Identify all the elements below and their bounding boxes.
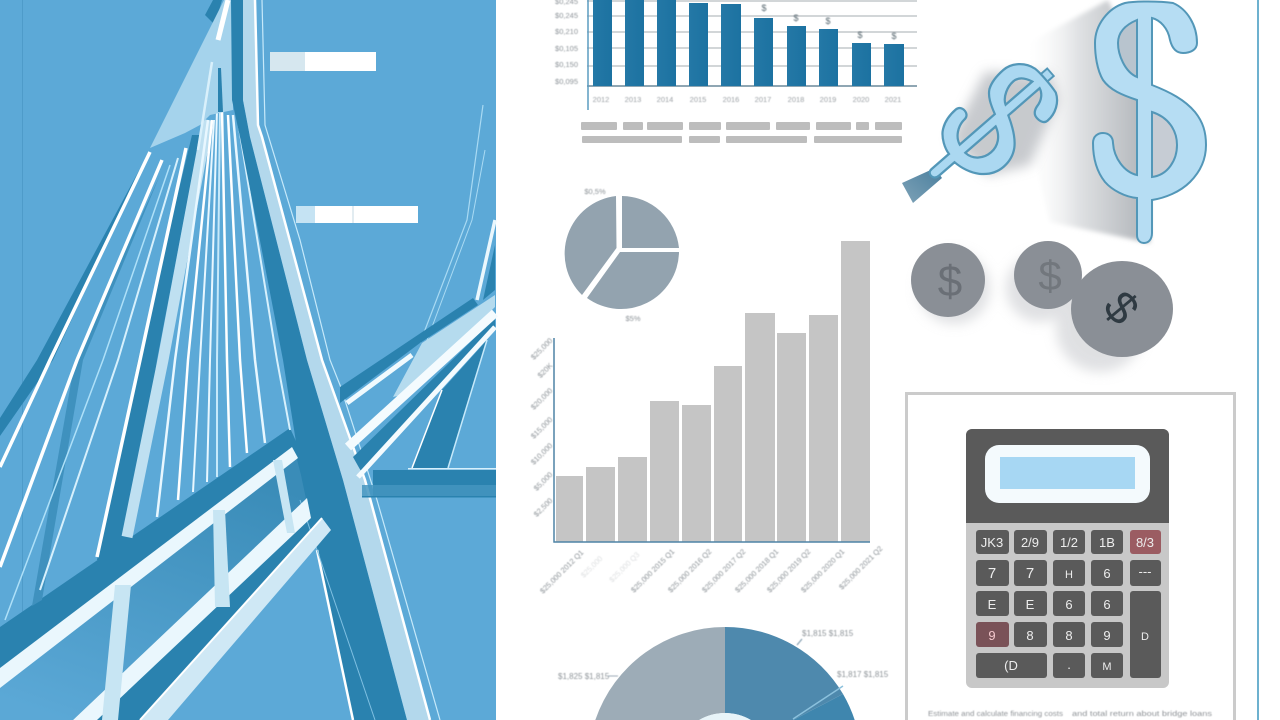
rotated x labels: $25,000 2015 Q1: [629, 547, 676, 594]
calculator key labels: 6: [1065, 597, 1073, 612]
upper light wedge of pylon: [150, 0, 233, 150]
y axis labels: $0,095: [555, 77, 578, 86]
rotated x labels: $25,000: [579, 554, 604, 580]
donut labels: $1,815 $1,815: [802, 629, 854, 638]
calculator key labels: 7: [1026, 565, 1034, 582]
icon: coin middle: $: [1038, 252, 1062, 299]
gray bars: [556, 241, 870, 542]
calculator key labels: 8: [1065, 628, 1073, 643]
y axis labels: $0,245: [555, 11, 578, 20]
x axis labels: 2014: [657, 95, 673, 104]
x axis labels: 2013: [625, 95, 641, 104]
x axis labels: 2018: [788, 95, 804, 104]
right page border line: [1257, 0, 1259, 720]
panel: calculator frame: [906, 394, 1234, 720]
calculator key labels: [981, 535, 1154, 673]
rotated x labels: $25,000 2012 Q1: [538, 548, 585, 595]
rotated y labels: [529, 336, 554, 519]
value labels: $: [825, 16, 831, 26]
x axis labels: 2017: [755, 95, 771, 104]
calculator key labels: 1B: [1099, 535, 1115, 550]
y axis labels: $0,210: [555, 27, 578, 36]
calculator key labels: E: [1026, 597, 1035, 612]
calculator key labels: 2/9: [1021, 535, 1039, 550]
calculator key labels: 8/3: [1136, 535, 1154, 550]
calculator key labels: E: [988, 597, 997, 612]
calculator key labels: M: [1102, 661, 1112, 673]
vertical hangers: [102, 460, 295, 720]
coin shadows: [918, 252, 1144, 372]
pie labels: $5%: [625, 314, 641, 323]
x axis labels: 2021: [885, 95, 901, 104]
icon: coin large: [1071, 261, 1173, 357]
value labels: [761, 3, 897, 41]
calculator key labels: (D: [1004, 658, 1018, 673]
x axis labels: [593, 95, 901, 104]
icon: coin left: [911, 243, 985, 317]
calculator key labels: 1/2: [1060, 535, 1078, 550]
bridge deck dark band: [0, 428, 335, 720]
rotated y labels: $25,000: [529, 336, 554, 362]
grid lines and axes: [587, 0, 917, 110]
y axis labels: $0,150: [555, 60, 578, 69]
value labels: $: [793, 13, 799, 23]
calculator key labels: ---: [1138, 564, 1152, 579]
icon: coin middle: [1014, 241, 1082, 309]
fan of stay cables: [0, 110, 290, 620]
calculator key labels: 9: [988, 628, 996, 643]
pie labels: $0,5%: [584, 187, 606, 196]
rotated x labels: [538, 544, 884, 595]
donut chart: [558, 627, 889, 720]
rotated y labels: $10,000: [529, 441, 554, 467]
label bar: lower: [296, 206, 418, 223]
far side deck and rear pylon: [340, 105, 496, 498]
calculator keys: [976, 530, 1161, 678]
donut labels: [558, 629, 889, 681]
calculator key labels: JK3: [981, 535, 1003, 550]
icon: tilted dollar sign: [902, 47, 1077, 207]
gray legend blocks: [581, 122, 902, 143]
x axis labels: 2012: [593, 95, 609, 104]
rotated y labels: $20K: [536, 361, 554, 380]
rotated x labels: $25,000 2017 Q2: [700, 547, 747, 594]
calculator key labels: H: [1065, 569, 1073, 581]
calculator caption: and total return about bridge loans: [1072, 711, 1213, 718]
rotated x labels: $25,000 2019 Q2: [765, 547, 812, 594]
rotated y labels: $15,000: [529, 415, 554, 441]
bars: [593, 0, 904, 86]
calculator key labels: 6: [1103, 566, 1111, 581]
rotated x labels: $25,000 Q3: [607, 550, 641, 584]
icon: coin left: $: [938, 257, 962, 306]
calculator: [966, 429, 1169, 688]
main pylon: [231, 0, 440, 720]
value labels: $: [857, 30, 863, 40]
icon: coin large: $: [1094, 281, 1150, 334]
y axis labels: [555, 0, 578, 86]
rotated x labels: $25,000 2018 Q1: [733, 547, 780, 594]
rotated y labels: $2,500: [532, 496, 554, 519]
calculator key labels: .: [1067, 657, 1071, 672]
calculator caption: Estimate and calculate financing costs: [928, 711, 1064, 718]
value labels: $: [761, 3, 767, 13]
panel: bridge illustration: [0, 0, 496, 720]
rotated x labels: $25,000 2020 Q1: [799, 547, 846, 594]
pie labels: [584, 187, 641, 323]
rotated x labels: $25,000 2016 Q2: [666, 547, 713, 594]
top bar chart: [555, 0, 917, 143]
dollar shadows: [950, 0, 1150, 243]
small pie chart: [565, 187, 679, 323]
calculator caption: [928, 711, 1213, 718]
value labels: $: [891, 31, 897, 41]
rotated y labels: $5,000: [532, 470, 554, 493]
calculator key labels: 6: [1103, 597, 1111, 612]
x axis labels: 2020: [853, 95, 869, 104]
y axis labels: $0,105: [555, 44, 578, 53]
label bar: upper: [270, 52, 376, 71]
rotated y labels: $20,000: [529, 386, 554, 412]
x axis labels: 2019: [820, 95, 836, 104]
deck white rails: [0, 447, 331, 720]
rotated x labels: $25,000 2021 Q2: [837, 544, 884, 591]
donut labels: $1,825 $1,815: [558, 672, 610, 681]
x axis labels: 2016: [723, 95, 739, 104]
donut labels: $1,817 $1,815: [837, 670, 889, 679]
calculator key labels: 8: [1026, 628, 1034, 643]
chart axes: [554, 338, 870, 542]
calculator key labels: 9: [1103, 628, 1111, 643]
gray bar chart: [529, 241, 884, 595]
calculator key labels: D: [1141, 631, 1149, 643]
calculator key labels: 7: [988, 565, 996, 582]
x axis labels: 2015: [690, 95, 706, 104]
icon: large dollar sign: [1093, 2, 1206, 243]
calculator screen: [985, 445, 1150, 503]
